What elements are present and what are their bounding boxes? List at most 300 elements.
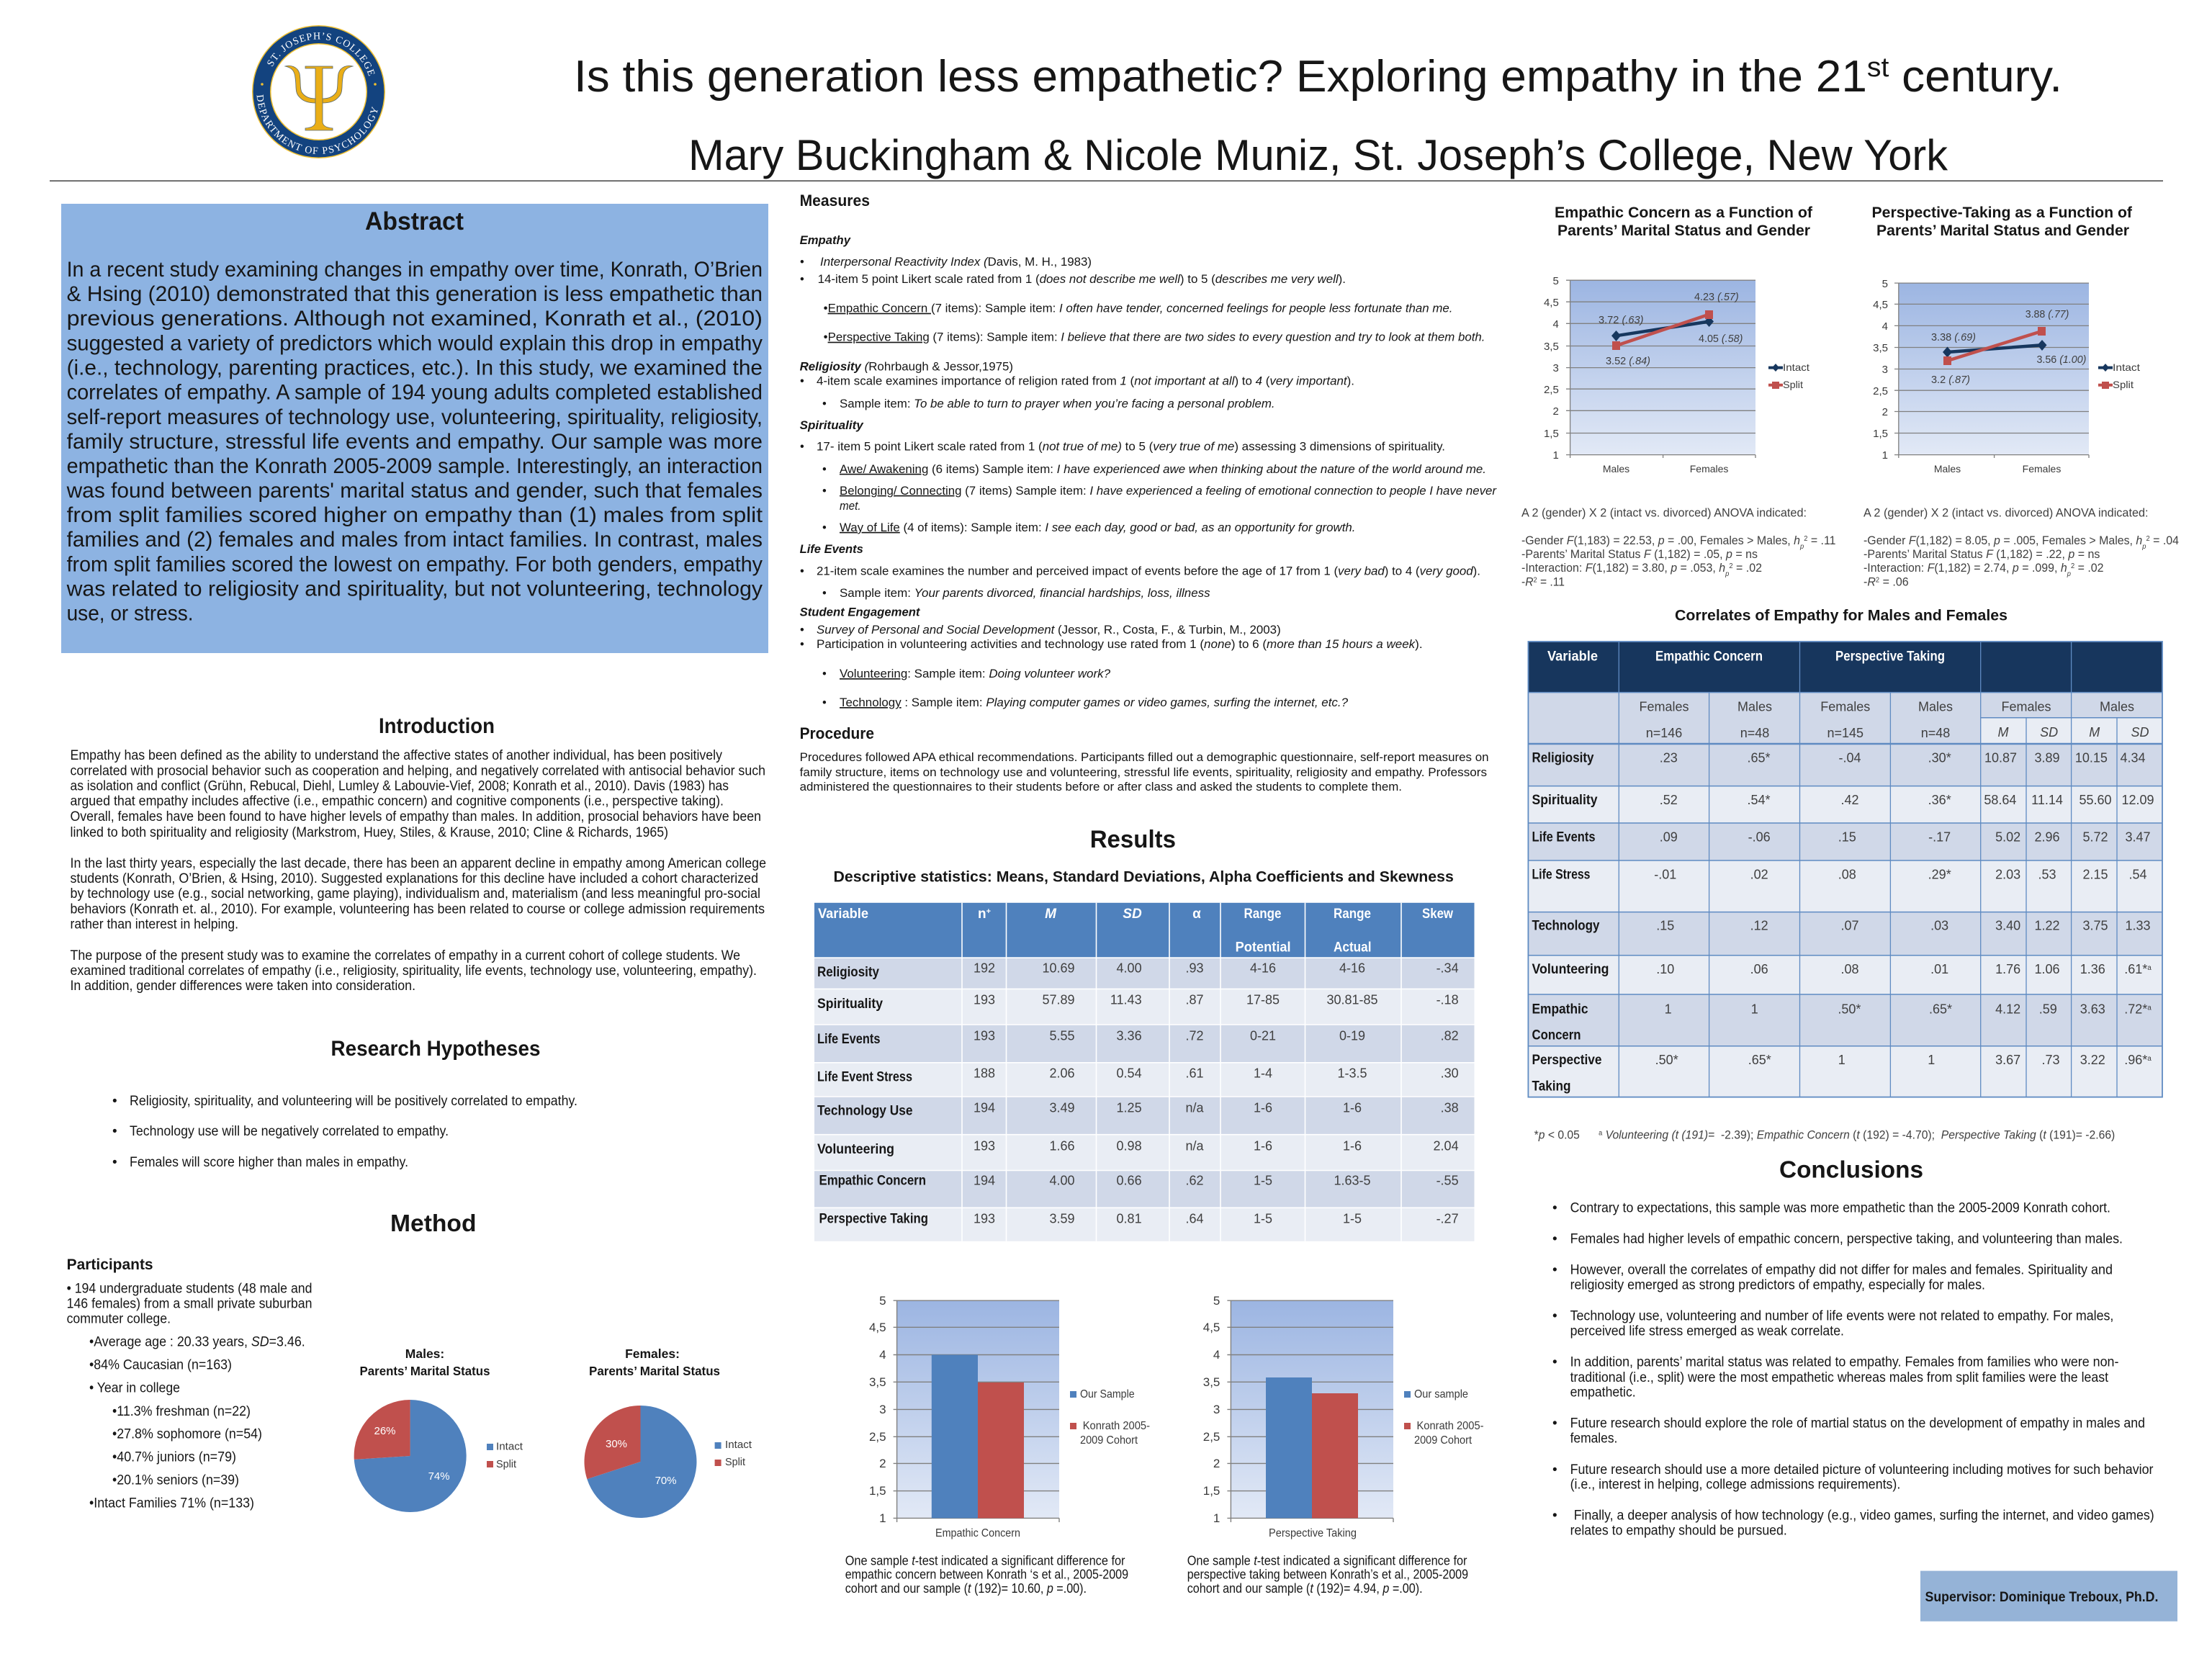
- line chart: perspective taking by marital status and gender: 3.88 (.77): [2026, 308, 2069, 320]
- table values: 5.55: [1049, 1028, 1074, 1043]
- participants list: •84% Caucasian (n=163): [89, 1358, 232, 1373]
- row labels: Life Events: [817, 1032, 880, 1047]
- bar chart: perspective taking: 1: [1213, 1511, 1220, 1525]
- table values: 3.47: [2125, 830, 2151, 845]
- table values: .08: [1838, 868, 1856, 882]
- table header: n+: [978, 907, 991, 922]
- measures list: 17- item 5 point Likert scale rated from 1 ( not true of me) to 5 (very true of me) assessing 3 dimensions of spirituality.: [817, 441, 1445, 454]
- panel: research hypotheses: [112, 1037, 577, 1170]
- conclusions list: religiosity emerged as strong predictors of empathy, especially for males.: [1570, 1277, 1985, 1292]
- sub-header: n=146: [1646, 726, 1682, 740]
- row labels: [1532, 750, 1609, 1094]
- bar chart: empathic concern: 1,5: [869, 1484, 886, 1498]
- measures list: •: [822, 696, 827, 709]
- conclusions list: However, overall the correlates of empathy did not differ for males and females. Spirituality and: [1570, 1262, 2113, 1277]
- bar chart: empathic concern: Empathic Concern: [935, 1527, 1020, 1539]
- table values: 1-3.5: [1337, 1066, 1367, 1081]
- table values: .54*: [1747, 793, 1771, 807]
- table values: -.34: [1437, 961, 1459, 975]
- ANOVA results: empathic concern: -R2 = .11: [1521, 575, 1565, 589]
- table values: 10.87: [1984, 750, 2017, 765]
- conclusions list: •: [1552, 1508, 1557, 1524]
- table values: 11.14: [2031, 793, 2063, 807]
- table values: 3.59: [1049, 1211, 1074, 1226]
- row labels: Taking: [1532, 1079, 1571, 1094]
- table values: .64: [1185, 1211, 1204, 1226]
- table values: 193: [974, 1211, 995, 1226]
- measures list: Sample item: Your parents divorced, financial hardships, loss, illness: [840, 587, 1210, 600]
- table values: -.04: [1838, 750, 1861, 765]
- conclusions list: relates to empathy should be pursued.: [1570, 1524, 1787, 1538]
- row labels: Life Events: [1532, 830, 1596, 845]
- measures list: [800, 234, 1498, 709]
- abstract body text: correlates of empathy. A sample of 194 young adults completed established: [67, 380, 763, 405]
- measures list: Volunteering: Sample item: Doing volunteer work?: [840, 667, 1111, 680]
- measures list: 14-item 5 point Likert scale rated from 1 ( does not describe me well ) to 5 (describes me very well).: [818, 273, 1346, 286]
- table header: Range: [1334, 907, 1371, 922]
- line chart: empathic concern by marital status and gender: 1: [1552, 449, 1559, 462]
- panel: method: [67, 1210, 477, 1511]
- conclusions list: •: [1552, 1416, 1557, 1431]
- table values: 1-5: [1254, 1211, 1272, 1226]
- table values: .08: [1840, 962, 1859, 976]
- table values: 2.06: [1049, 1066, 1074, 1081]
- line chart: empathic concern by marital status and gender: Females: [1690, 463, 1728, 475]
- abstract body text: self-report measures of technology use, volunteering, spirituality, religiosity,: [67, 405, 763, 429]
- ANOVA results: perspective taking: -Gender F(1,182) = 8.05, p = .005, Females > Males, hp2 = .04: [1863, 534, 2179, 550]
- row labels: Perspective Taking: [819, 1211, 928, 1227]
- line chart: perspective taking by marital status and gender: 3.38 (.69): [1931, 331, 1976, 343]
- row labels: Technology Use: [817, 1103, 913, 1118]
- procedure heading: Procedure: [800, 724, 874, 742]
- table values: .96*a: [2124, 1053, 2152, 1067]
- table values: 1.06: [2034, 962, 2060, 976]
- table values: 4.00: [1049, 1174, 1074, 1188]
- conclusions list: Technology use, volunteering and number of life events were not related to empathy. For males,: [1570, 1309, 2113, 1324]
- table values: 4.00: [1117, 961, 1142, 975]
- introduction body text: linked to both spirituality and religiosity (Markstrom, Huey, Stiles, & Krause, 2010; Cline & Richards, 1965): [71, 825, 668, 840]
- table values: .72*a: [2124, 1002, 2152, 1016]
- caption: perspective taking t-test: [1187, 1554, 1468, 1596]
- row labels: Empathic: [1532, 1002, 1588, 1017]
- abstract body text: from split families scored higher on empathy than (1) males from split: [67, 503, 763, 527]
- hypotheses heading: Research Hypotheses: [331, 1037, 540, 1061]
- ANOVA results: perspective taking: -R2 = .06: [1863, 575, 1909, 589]
- measures list: met.: [840, 500, 861, 513]
- hypotheses list: •: [112, 1094, 117, 1109]
- measures list: •: [822, 463, 827, 476]
- table values: .42: [1840, 793, 1859, 807]
- pie chart: females parents' marital status: Split: [725, 1456, 746, 1468]
- line chart: empathic concern by marital status and gender: Males: [1603, 463, 1629, 475]
- sub-header: Females: [1820, 700, 1870, 714]
- table header: α: [1192, 907, 1201, 922]
- line chart: perspective taking by marital status and gender: [1872, 204, 2140, 475]
- bar chart: perspective taking: 4: [1213, 1348, 1220, 1362]
- row labels: Religiosity: [817, 965, 879, 980]
- table values: .38: [1441, 1100, 1459, 1115]
- pie chart: males parents' marital status: Split: [496, 1458, 517, 1470]
- table values: 5.02: [1995, 830, 2020, 845]
- table values: .15: [1838, 830, 1856, 845]
- bar chart: empathic concern: 2: [879, 1457, 886, 1470]
- table values: .82: [1441, 1028, 1459, 1043]
- table values: .73: [2041, 1053, 2060, 1067]
- measures list: •: [800, 565, 804, 577]
- table header: Range: [1244, 907, 1282, 922]
- abstract body text: previous generations. Although not examined, Konrath et al., (2010): [67, 307, 763, 331]
- table values: 193: [974, 1028, 995, 1043]
- caption: empathic concern t-test: empathic concern between Konrath ‘s et al., 2005-2009: [845, 1568, 1128, 1582]
- participants list: • 194 undergraduate students (48 male and: [67, 1281, 312, 1296]
- abstract body text: family structure, stressful life events and empathy. Our sample was more: [67, 430, 763, 454]
- table values: 194: [974, 1174, 995, 1188]
- table values: 3.49: [1049, 1100, 1074, 1115]
- table values: 1.36: [2080, 962, 2105, 976]
- table values: .07: [1840, 919, 1859, 933]
- line chart: perspective taking by marital status and gender: 4,5: [1873, 299, 1888, 311]
- table values: .12: [1750, 919, 1768, 933]
- line chart: perspective taking by marital status and gender: 1,5: [1873, 428, 1888, 440]
- line chart: empathic concern by marital status and gender: 4,5: [1544, 297, 1559, 309]
- abstract heading: Abstract: [365, 207, 464, 235]
- table values: .01: [1930, 962, 1948, 976]
- bar chart: empathic concern: [869, 1294, 1150, 1539]
- measures list: •: [822, 587, 827, 600]
- introduction body text: students (Konrath, O’Brien, & Hsing, 2010). Suggested explanations for this decline have included a cohort characterized: [71, 871, 758, 886]
- participants list: •27.8% sophomore (n=54): [112, 1427, 262, 1442]
- bar chart: perspective taking: 2009 Cohort: [1414, 1434, 1473, 1447]
- table values: 0-19: [1339, 1028, 1365, 1043]
- table values: -.18: [1437, 993, 1459, 1007]
- line chart: empathic concern by marital status and gender: Intact: [1783, 361, 1809, 373]
- table values: 17-85: [1246, 993, 1280, 1007]
- table values: 1: [1665, 1002, 1672, 1016]
- abstract body text: from split families scored the lowest on empathy. For both genders, empathy: [67, 553, 763, 576]
- pie chart: females parents' marital status: Intact: [725, 1439, 752, 1451]
- table values: 1.66: [1049, 1138, 1074, 1153]
- participants list: •Intact Families 71% (n=133): [89, 1496, 254, 1511]
- line chart: perspective taking by marital status and gender: 1: [1882, 449, 1888, 462]
- bar chart: perspective taking: Perspective Taking: [1269, 1527, 1357, 1539]
- abstract body text: use, or stress.: [67, 602, 194, 625]
- ANOVA results: perspective taking: -Interaction: F(1,182) = 2.74, p = .099, hp2 = .02: [1863, 561, 2104, 577]
- introduction body text: rather than interest in helping.: [71, 917, 238, 932]
- line chart: perspective taking by marital status and gender: 3.2 (.87): [1931, 374, 1970, 386]
- table values: -.17: [1928, 830, 1951, 845]
- table values: 0.81: [1117, 1211, 1142, 1226]
- table values: .59: [2039, 1002, 2057, 1016]
- table values: 10.15: [2075, 750, 2108, 765]
- line chart: empathic concern by marital status and gender: [1544, 204, 1813, 475]
- line chart: empathic concern by marital status and gender: 3.72 (.63): [1599, 314, 1644, 326]
- introduction body text: correlated with prosocial behavior such as cooperation and helping, and negatively correlated with antisocial behavior such: [71, 764, 765, 779]
- row labels: Life Stress: [1532, 868, 1590, 883]
- participants list: • Year in college: [89, 1381, 180, 1395]
- conclusions heading: Conclusions: [1779, 1156, 1923, 1182]
- conclusions list: In addition, parents’ marital status was related to empathy. Females from families who were non-: [1570, 1354, 2118, 1370]
- bar chart: perspective taking: 4,5: [1203, 1321, 1220, 1334]
- procedure body text: family structure, items on technology use and volunteering, stressful life events, spirituality, religiosity and empathy. Professors: [800, 766, 1487, 779]
- table values: 4-16: [1250, 961, 1276, 975]
- ANOVA results: perspective taking: [1863, 505, 2179, 589]
- method heading: Method: [390, 1210, 477, 1236]
- row labels: [817, 965, 928, 1227]
- row labels: Volunteering: [1532, 962, 1609, 977]
- table values: 0.66: [1117, 1174, 1142, 1188]
- bar chart: perspective taking: [1203, 1294, 1483, 1539]
- measures list: Life Events: [800, 543, 863, 556]
- abstract body text: was found between parents' marital status and gender, such that females: [66, 479, 763, 503]
- sub-header: n=145: [1827, 726, 1863, 740]
- table values: .61*a: [2124, 962, 2152, 976]
- authors: Mary Buckingham & Nicole Muniz, St. Joseph’s College, New York: [688, 131, 1948, 179]
- introduction body text: [71, 748, 766, 994]
- table values: .36*: [1928, 793, 1951, 807]
- sub-header: Males: [1737, 700, 1772, 714]
- row labels: Religiosity: [1532, 750, 1594, 766]
- table values: 192: [974, 961, 995, 975]
- table values: .61: [1185, 1066, 1204, 1081]
- table header: Perspective Taking: [1835, 649, 1945, 665]
- bar chart: perspective taking: 3: [1213, 1403, 1220, 1416]
- line chart: perspective taking by marital status and gender: 5: [1882, 278, 1888, 290]
- table values: 57.89: [1042, 993, 1074, 1007]
- table values: 3.67: [1995, 1053, 2020, 1067]
- introduction body text: by technology use (e.g., social networking, game playing), individualism and, materialism (and less meaningful pro-social: [71, 886, 760, 902]
- hypotheses list: [112, 1094, 577, 1170]
- measures list: Belonging/ Connecting (7 items) Sample item: I have experienced a feeling of emotional connection to people I have never: [840, 485, 1498, 498]
- line chart: empathic concern by marital status and gender: 4.05 (.58): [1699, 333, 1743, 345]
- hypotheses list: •: [112, 1124, 117, 1139]
- line chart: perspective taking by marital status and gender: Split: [2113, 379, 2134, 390]
- conclusions list: [1552, 1200, 2154, 1538]
- supervisor box: Supervisor: Dominique Treboux, Ph.D.: [1925, 1590, 2158, 1605]
- table values: -.01: [1654, 868, 1676, 882]
- abstract body text: families and (2) females and males from intact families. In contrast, males: [67, 528, 763, 552]
- participants list: •Average age : 20.33 years, SD=3.46.: [89, 1334, 305, 1349]
- participants list: •40.7% juniors (n=79): [112, 1449, 236, 1465]
- table values: 11.43: [1110, 993, 1142, 1007]
- table values: .87: [1185, 993, 1204, 1007]
- sub-header: M: [2089, 725, 2100, 739]
- pie chart: females parents' marital status: [584, 1346, 752, 1518]
- table: correlates of empathy: [1528, 642, 2162, 1097]
- table footnote: *p < 0.05 a Volunteering (t (191)= -2.39); Empathic Concern (t (192) = -4.70); Perspective Taking (t (191)= -2.66): [1534, 1128, 2115, 1142]
- measures list: Sample item: To be able to turn to prayer when you’re facing a personal problem.: [840, 397, 1275, 410]
- table values: 2.15: [2082, 868, 2108, 882]
- table values: .52: [1660, 793, 1678, 807]
- title: Is this generation less empathetic? Exploring empathy in the 21 st century.: [574, 52, 2062, 102]
- measures list: Empathy: [800, 234, 851, 247]
- table values: 4-16: [1339, 961, 1365, 975]
- participants list: •20.1% seniors (n=39): [112, 1473, 239, 1488]
- introduction body text: Empathy has been defined as the ability to understand the affective states of another individual, has been positively: [71, 748, 722, 763]
- participants list: •11.3% freshman (n=22): [112, 1404, 251, 1419]
- table values: 1: [1928, 1053, 1935, 1067]
- table values: 58.64: [1984, 793, 2016, 807]
- sub-header: n=48: [1740, 726, 1769, 740]
- bar chart: empathic concern: Our Sample: [1080, 1388, 1135, 1401]
- table values: 0.98: [1117, 1138, 1142, 1153]
- table values: .50*: [1655, 1053, 1678, 1067]
- measures list: Spirituality: [800, 419, 864, 432]
- panel: abstract: [61, 204, 768, 653]
- conclusions list: (i.e., interest in helping, college admissions requirements).: [1570, 1478, 1900, 1493]
- table values: .30: [1441, 1066, 1459, 1081]
- bar chart: perspective taking: 5: [1213, 1294, 1220, 1308]
- sub-header: Females: [2001, 700, 2051, 714]
- measures list: •Perspective Taking (7 items): Sample item: I believe that there are two sides to every question and try to look at them both.: [824, 331, 1485, 344]
- table values: n/a: [1185, 1138, 1204, 1153]
- table values: 1-6: [1254, 1100, 1272, 1115]
- table values: 193: [974, 993, 995, 1007]
- caption: empathic concern t-test: One sample t-test indicated a significant difference for: [845, 1554, 1125, 1568]
- line chart: empathic concern by marital status and gender: 3,5: [1544, 341, 1559, 353]
- table values: 30.81-85: [1326, 993, 1378, 1007]
- participants list: [67, 1281, 312, 1511]
- pie chart: females parents' marital status: Parents’ Marital Status: [589, 1364, 720, 1378]
- table values: 3.22: [2080, 1053, 2105, 1067]
- table: descriptive statistics: [814, 903, 1475, 1241]
- line chart: perspective taking by marital status and gender: Parents’ Marital Status and Gender: [1876, 222, 2129, 239]
- procedure body text: Procedures followed APA ethical recommendations. Participants filled out a demographic questionnaire, self-report measures on: [800, 751, 1489, 764]
- table values: 3.36: [1117, 1028, 1142, 1043]
- bar chart: empathic concern: 4: [879, 1348, 886, 1362]
- table values: .15: [1656, 919, 1674, 933]
- supervisor box: [1920, 1571, 2177, 1622]
- sub-header: Females: [1639, 700, 1689, 714]
- line chart: empathic concern by marital status and gender: Split: [1783, 379, 1803, 390]
- table values: 3.89: [2034, 750, 2060, 765]
- table values: -.06: [1748, 830, 1771, 845]
- measures list: Interpersonal Reactivity Index ( Davis, M. H., 1983): [820, 256, 1092, 269]
- measures list: Participation in volunteering activities and technology use rated from 1 ( none) to 6 (more than 15 hours a week ).: [817, 638, 1423, 651]
- bar chart: empathic concern: 5: [879, 1294, 886, 1308]
- sub-header: Males: [1918, 700, 1953, 714]
- introduction body text: The purpose of the present study was to examine the correlates of empathy in a current cohort of college students. We: [71, 948, 740, 963]
- row labels: Concern: [1532, 1028, 1581, 1043]
- table values: .02: [1750, 868, 1768, 882]
- table values: 1-6: [1343, 1138, 1362, 1153]
- bar chart: perspective taking: 3,5: [1203, 1375, 1220, 1389]
- row labels: Volunteering: [817, 1142, 894, 1157]
- table header: SD: [1123, 907, 1142, 922]
- icon: college psychology department seal: [252, 25, 385, 158]
- measures list: Awe/ Awakening (6 items) Sample item: I have experienced awe when thinking about the nature of the world around me.: [840, 463, 1486, 476]
- line chart: perspective taking by marital status and gender: Males: [1934, 463, 1961, 475]
- table values: 2.04: [1434, 1138, 1459, 1153]
- pie chart: males parents' marital status: Males:: [405, 1346, 444, 1361]
- line chart: empathic concern by marital status and gender: Parents’ Marital Status and Gender: [1557, 222, 1810, 239]
- table values: 1-4: [1254, 1066, 1272, 1081]
- introduction body text: behaviors (Konrath et. al., 2010). For example, volunteering has been related to course or college admission requirements: [71, 902, 765, 917]
- measures list: •: [822, 397, 827, 410]
- measures list: •: [822, 667, 827, 680]
- measures list: •: [822, 485, 827, 498]
- table header: [1547, 649, 1945, 665]
- line chart: perspective taking by marital status and gender: 3,5: [1873, 342, 1888, 354]
- table values: -.27: [1437, 1211, 1459, 1226]
- table values: 1: [1838, 1053, 1845, 1067]
- measures list: •: [800, 256, 804, 269]
- abstract body text: was related to religiosity and spirituality, but not volunteering, technology: [66, 577, 763, 601]
- conclusions list: •: [1552, 1462, 1557, 1478]
- table values: 1-5: [1343, 1211, 1362, 1226]
- row labels: Spirituality: [1532, 793, 1598, 808]
- table values: -.55: [1437, 1174, 1459, 1188]
- table values: 1.22: [2034, 919, 2060, 933]
- introduction body text: examined traditional correlates of empathy (i.e., religiosity, spirituality, life events, technology use, volunteering, empathy).: [71, 963, 757, 979]
- hypotheses list: Technology use will be negatively correlated to empathy.: [130, 1124, 449, 1139]
- sub-header: n=48: [1921, 726, 1950, 740]
- conclusions list: perceived life stress emerged as weak correlate.: [1570, 1324, 1844, 1339]
- row labels: Technology: [1532, 919, 1600, 934]
- line chart: perspective taking by marital status and gender: 3: [1882, 364, 1888, 376]
- caption: empathic concern t-test: cohort and our sample (t (192)= 10.60, p =.00).: [845, 1581, 1087, 1596]
- line chart: perspective taking by marital status and gender: 3.56 (1.00): [2036, 354, 2086, 366]
- hypotheses list: Religiosity, spirituality, and volunteering will be positively correlated to empathy.: [130, 1094, 577, 1109]
- table values: 4.12: [1995, 1002, 2020, 1016]
- bar chart: perspective taking: 2: [1213, 1457, 1220, 1470]
- participants list: 146 females) from a small private suburban: [67, 1296, 312, 1312]
- ANOVA results: empathic concern: -Gender F(1,183) = 22.53, p = .00, Females > Males, hp2 = .11: [1521, 534, 1836, 550]
- panel: conclusions: [1552, 1156, 2154, 1538]
- table values: .23: [1660, 750, 1678, 765]
- sub-header: M: [1997, 725, 2009, 739]
- bar chart: empathic concern: 4,5: [869, 1321, 886, 1334]
- conclusions list: •: [1552, 1309, 1557, 1324]
- measures list: •: [800, 624, 804, 637]
- measures list: •: [800, 375, 804, 388]
- bar chart: empathic concern: 3: [879, 1403, 886, 1416]
- panel: procedure: [800, 724, 1489, 793]
- conclusions list: females.: [1570, 1431, 1617, 1446]
- table values: .62: [1185, 1174, 1204, 1188]
- table values: .50*: [1838, 1002, 1861, 1016]
- table values: 3.63: [2080, 1002, 2105, 1016]
- descriptive statistics table heading: Descriptive statistics: Means, Standard Deviations, Alpha Coefficients and Skewness: [834, 868, 1454, 885]
- conclusions list: Future research should explore the role of martial status on the development of empathy in males and: [1570, 1416, 2145, 1431]
- table values: .65*: [1748, 1053, 1771, 1067]
- table values: 1.25: [1117, 1100, 1142, 1115]
- line chart: perspective taking by marital status and gender: 2: [1882, 406, 1888, 418]
- icon: college psychology department seal: DEPARTMENT OF PSYCHOLOGY: [256, 94, 378, 154]
- ANOVA results: empathic concern: -Interaction: F(1,182) = 3.80, p = .053, hp2 = .02: [1521, 561, 1762, 577]
- row labels: Perspective: [1532, 1053, 1601, 1068]
- bar chart: empathic concern: 3,5: [869, 1375, 886, 1389]
- table header: Variable: [818, 907, 868, 922]
- table values: .65*: [1929, 1002, 1952, 1016]
- bar chart: empathic concern: 2009 Cohort: [1080, 1434, 1138, 1447]
- line chart: perspective taking by marital status and gender: Perspective-Taking as a Function of: [1872, 204, 2133, 221]
- abstract body text: [66, 258, 763, 625]
- measures list: Religiosity (Rohrbaugh & Jessor,1975): [800, 361, 1013, 374]
- bar chart: perspective taking: Konrath 2005-: [1417, 1420, 1483, 1432]
- table header: M: [1045, 907, 1057, 922]
- pie chart: females parents' marital status: Females:: [625, 1346, 680, 1361]
- line chart: empathic concern by marital status and gender: 2: [1552, 405, 1559, 418]
- table values: 1-6: [1343, 1100, 1362, 1115]
- table values: .72: [1185, 1028, 1204, 1043]
- measures list: Way of Life (4 of items): Sample item: I see each day, good or bad, as an opportunity for growth.: [840, 521, 1355, 534]
- ANOVA results: empathic concern: [1521, 505, 1836, 589]
- table values: .09: [1660, 830, 1678, 845]
- ANOVA results: perspective taking: -Parents’ Marital Status F (1,182) = .22, p = ns: [1863, 547, 2100, 561]
- results heading: Results: [1090, 826, 1176, 853]
- conclusions list: Future research should use a more detailed picture of volunteering including motives for such behavior: [1570, 1462, 2154, 1478]
- table values: 12.09: [2121, 793, 2154, 807]
